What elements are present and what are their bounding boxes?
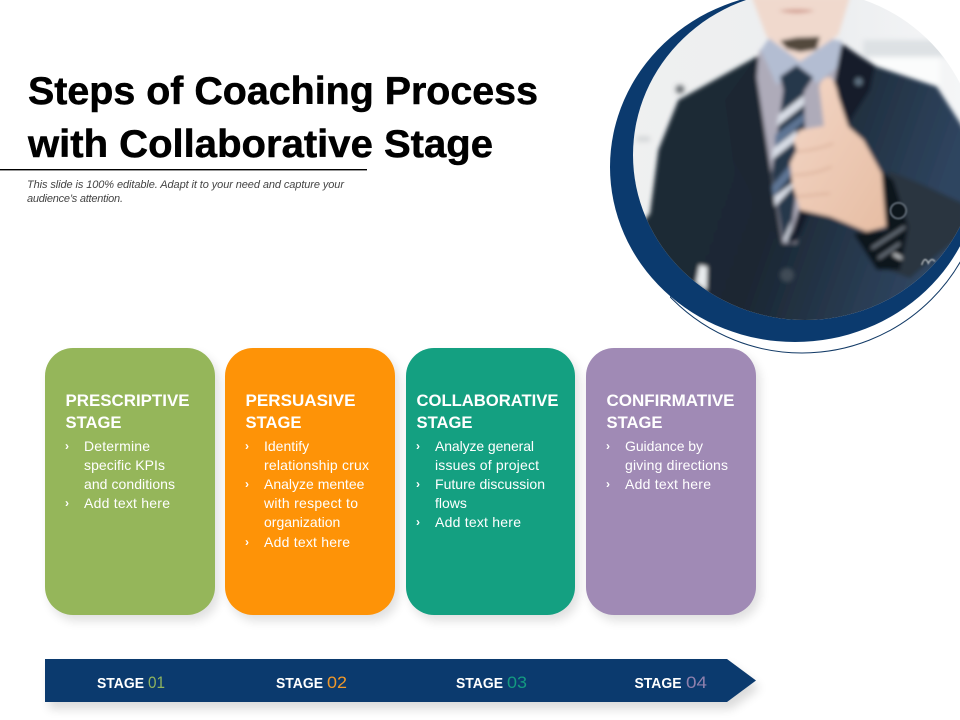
card: collaborative stage: › xyxy=(416,477,420,491)
card: persuasive stage: › xyxy=(245,439,249,453)
title: Steps of Coaching Process xyxy=(28,70,538,113)
card: confirmative stage: CONFIRMATIVE xyxy=(606,391,734,410)
stage 03 label: 03 xyxy=(507,673,527,692)
card: confirmative stage: › xyxy=(606,477,610,491)
stage 01 label xyxy=(97,673,165,692)
thin ring behind portrait xyxy=(670,262,960,354)
stage 01 label: STAGE xyxy=(97,676,144,692)
suit jacket xyxy=(644,54,960,320)
card: collaborative stage: › xyxy=(416,439,420,453)
subtitle: audience’s attention. xyxy=(27,193,123,205)
card: confirmative stage xyxy=(586,348,760,621)
subtitle: This slide is 100% editable. Adapt it to your need and capture your xyxy=(27,179,345,191)
card: collaborative stage: COLLABORATIVE xyxy=(416,391,558,410)
card: persuasive stage: PERSUASIVE xyxy=(246,391,356,410)
stage 01 label: 01 xyxy=(148,673,165,692)
title: with Collaborative Stage xyxy=(27,123,493,166)
card: prescriptive stage: STAGE xyxy=(66,413,122,432)
cuff button xyxy=(922,260,935,265)
card: collaborative stage: Analyze general xyxy=(435,438,534,454)
stage 04 label: 04 xyxy=(686,673,707,692)
sleeve xyxy=(855,170,960,278)
card: confirmative stage: giving directions xyxy=(625,457,728,473)
card: prescriptive stage: › xyxy=(65,496,69,510)
portrait photo: man giving thumbs up xyxy=(620,0,960,333)
cuff xyxy=(853,170,908,270)
shirt xyxy=(757,40,843,243)
card: collaborative stage xyxy=(406,348,579,621)
card: prescriptive stage: Add text here xyxy=(84,495,170,511)
stage 04 label xyxy=(634,673,707,692)
title xyxy=(27,70,538,166)
card: persuasive stage: Identify xyxy=(264,438,309,454)
card: confirmative stage: STAGE xyxy=(606,413,662,432)
stage 02 label xyxy=(276,673,347,692)
card: confirmative stage: › xyxy=(606,439,610,453)
card: prescriptive stage: PRESCRIPTIVE xyxy=(66,391,190,410)
stage 02 label: 02 xyxy=(327,673,347,692)
card: collaborative stage: Add text here xyxy=(435,514,521,530)
title rule xyxy=(0,169,367,170)
card: persuasive stage: Analyze mentee xyxy=(264,476,365,492)
card: prescriptive stage: › xyxy=(65,439,69,453)
card: collaborative stage: Future discussion xyxy=(435,476,545,492)
card: collaborative stage: › xyxy=(416,515,420,529)
card: persuasive stage: › xyxy=(245,477,249,491)
card: collaborative stage: flows xyxy=(435,495,467,511)
stage 02 label: STAGE xyxy=(276,676,323,692)
lapels xyxy=(770,175,784,246)
gap between arm and torso xyxy=(696,265,707,291)
stage 03 label xyxy=(456,673,527,692)
watch xyxy=(890,203,906,219)
stage 03 label: STAGE xyxy=(456,676,503,692)
card: persuasive stage xyxy=(225,348,399,621)
card: persuasive stage: Add text here xyxy=(264,534,350,550)
card: collaborative stage: issues of project xyxy=(435,457,539,473)
collar xyxy=(761,37,843,85)
hand with thumb xyxy=(790,77,886,232)
face xyxy=(752,0,850,62)
card: collaborative stage: STAGE xyxy=(416,413,472,432)
card: persuasive stage: STAGE xyxy=(246,413,302,432)
card: prescriptive stage xyxy=(45,348,219,621)
navy crescent behind portrait xyxy=(610,0,960,342)
card: prescriptive stage: specific KPIs xyxy=(84,457,165,473)
subtitle xyxy=(27,179,345,205)
card: persuasive stage: › xyxy=(245,535,249,549)
card: prescriptive stage: and conditions xyxy=(84,476,175,492)
card: persuasive stage: with respect to xyxy=(263,495,358,511)
card: confirmative stage: Add text here xyxy=(625,476,711,492)
tie xyxy=(772,65,813,242)
jacket button xyxy=(780,268,794,282)
card: confirmative stage: Guidance by xyxy=(625,438,703,454)
arrow banner: stage timeline xyxy=(45,659,760,709)
stage 04 label: STAGE xyxy=(634,676,682,692)
card: persuasive stage: relationship crux xyxy=(264,457,369,473)
card: prescriptive stage: Determine xyxy=(84,438,150,454)
card: persuasive stage: organization xyxy=(264,514,340,530)
